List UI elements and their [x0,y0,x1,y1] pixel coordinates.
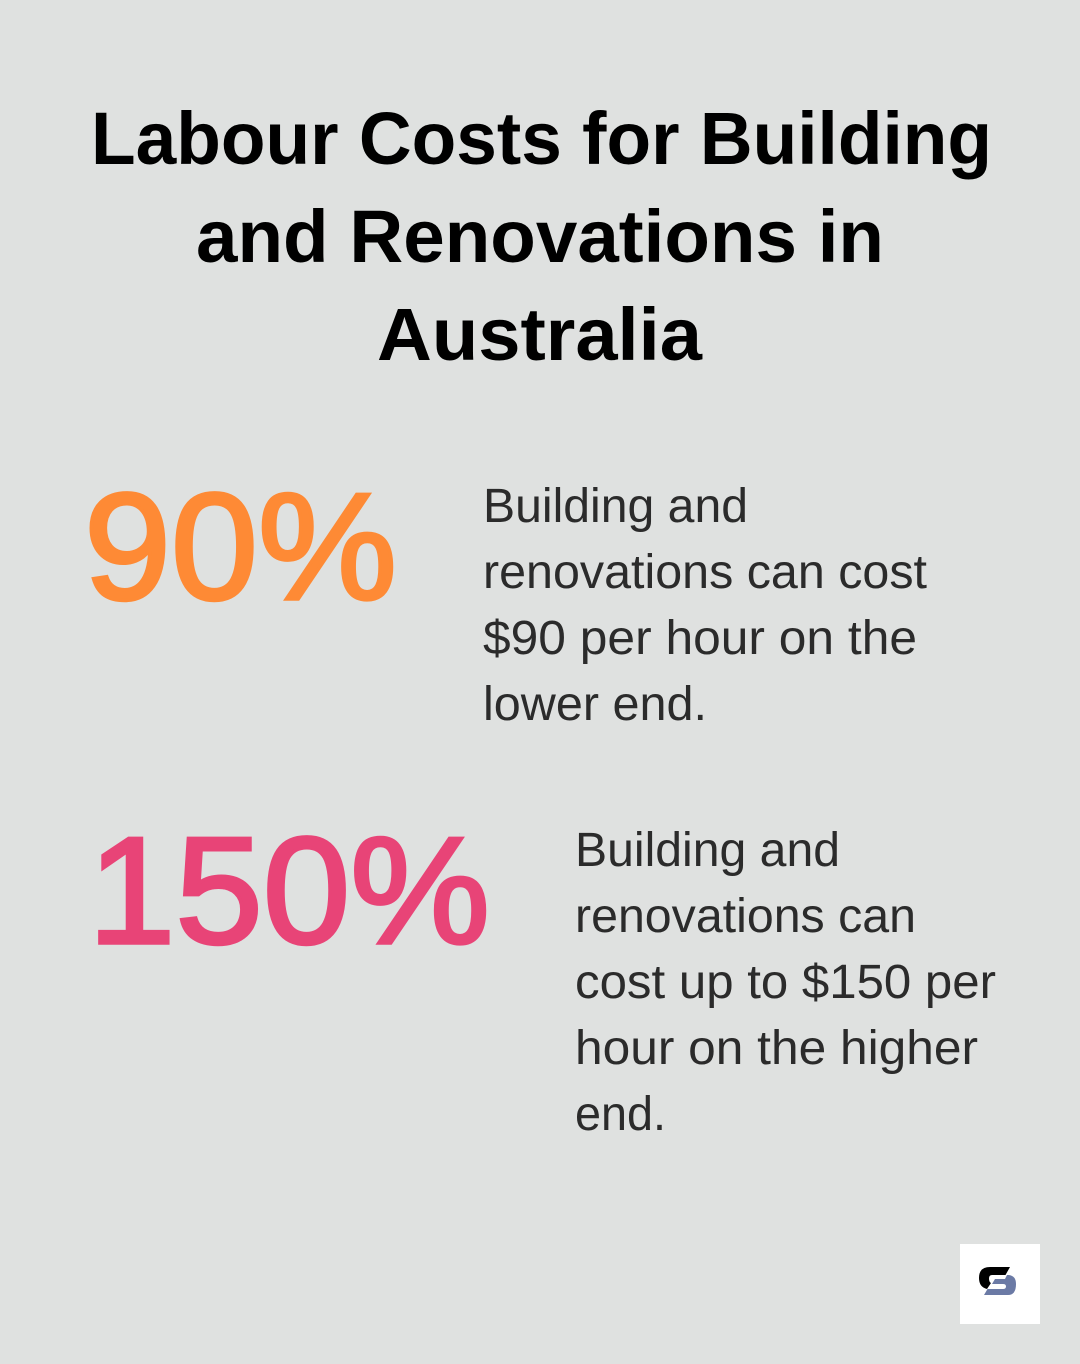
title: and Renovations in [196,195,884,278]
description: 150% stat: Building and [575,824,840,877]
description: 150% stat: renovations can [575,890,916,943]
title [91,97,992,376]
description: 150% stat: end. [575,1088,666,1141]
description: 150% stat [575,824,996,1141]
description: 90% stat: lower end. [483,678,707,731]
stat: 90%: 90% [84,462,397,632]
description: 90% stat [483,480,927,731]
logo badge [960,1244,1040,1324]
description: 90% stat: renovations can cost [483,546,927,599]
description: 90% stat: $90 per hour on the [483,612,917,665]
description: 150% stat: cost up to $150 per [575,956,996,1009]
title: Labour Costs for Building [91,97,992,180]
stat: 150%: 150% [88,806,490,976]
title: Australia [377,293,703,376]
description: 90% stat: Building and [483,480,748,533]
description: 150% stat: hour on the higher [575,1022,978,1075]
